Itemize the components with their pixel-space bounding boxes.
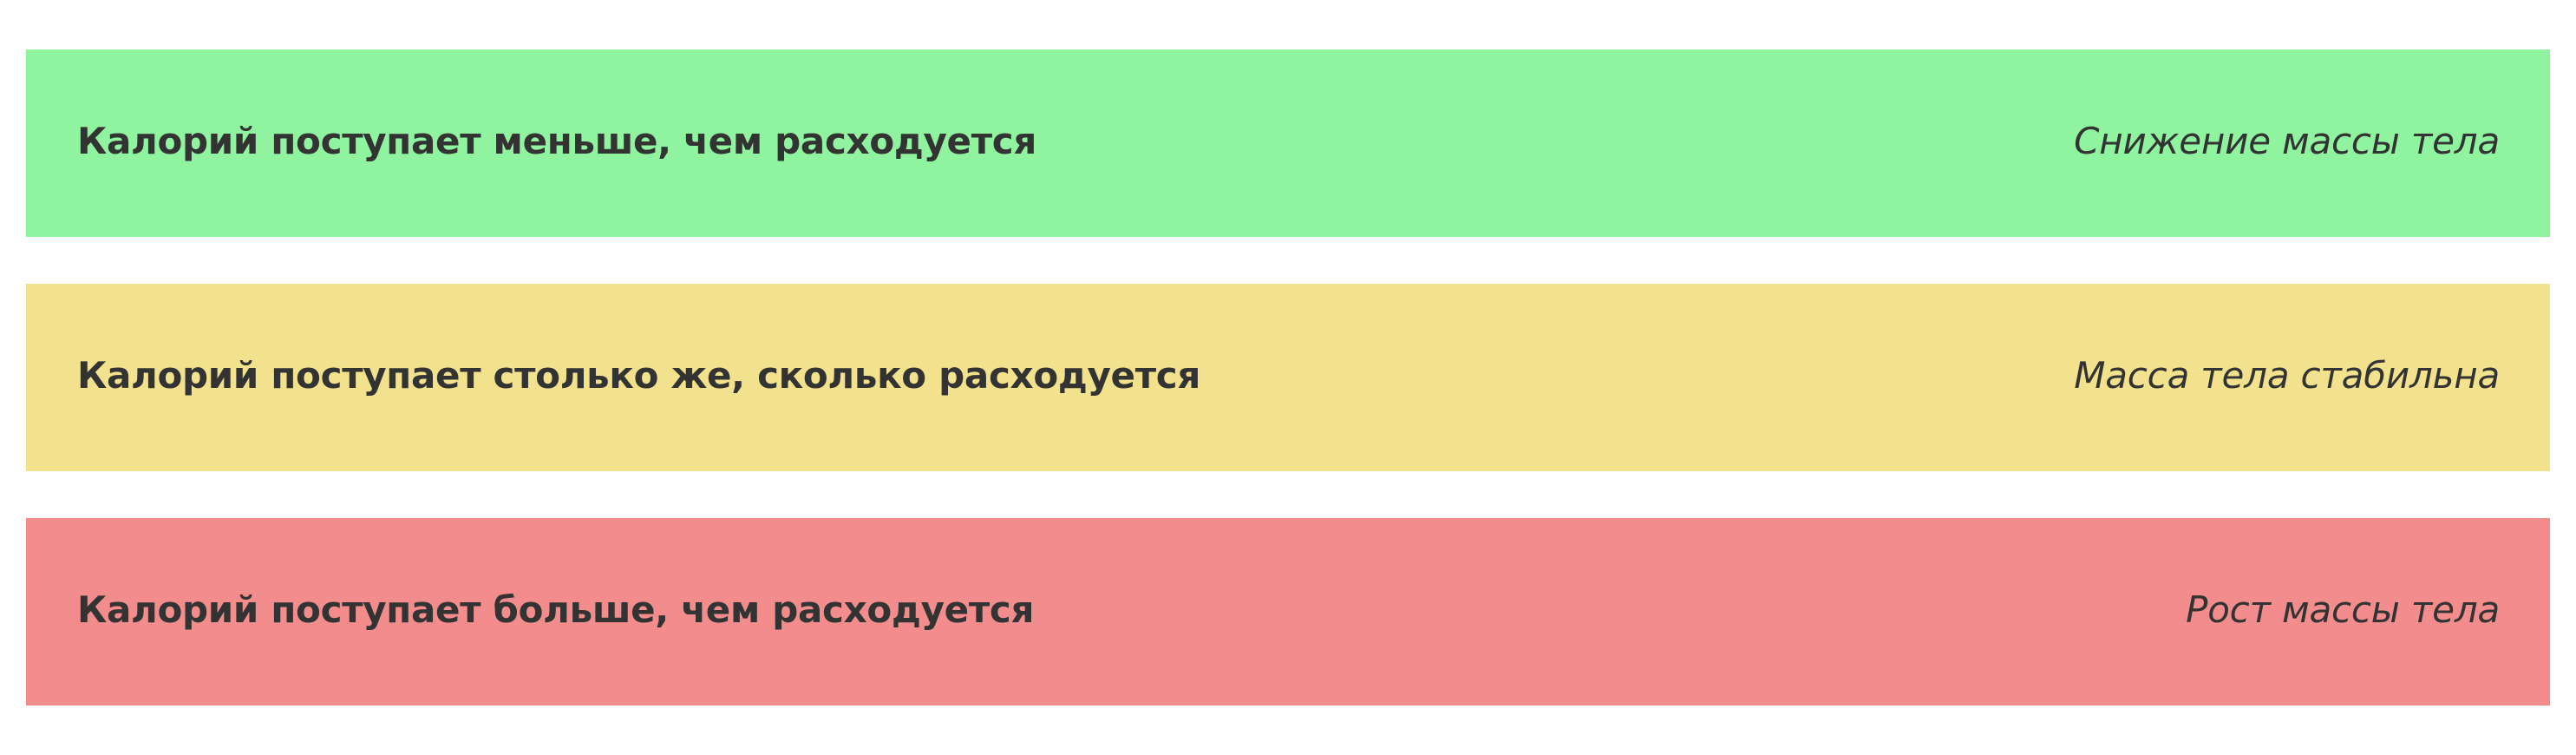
panel: calorie balance — [26, 284, 2550, 471]
outcome: stable weight: Масса тела стабильна — [2074, 354, 2500, 397]
statement: surplus: Калорий поступает больше, чем расходуется — [77, 588, 1034, 631]
outcome: weight gain: Рост массы тела — [2186, 588, 2500, 631]
statement: balance: Калорий поступает столько же, сколько расходуется — [77, 354, 1200, 397]
statement: deficit: Калорий поступает меньше, чем расходуется — [77, 120, 1036, 162]
panel: calorie surplus — [26, 518, 2550, 706]
panel: calorie deficit — [26, 49, 2550, 237]
outcome: weight loss: Снижение массы тела — [2074, 120, 2500, 162]
